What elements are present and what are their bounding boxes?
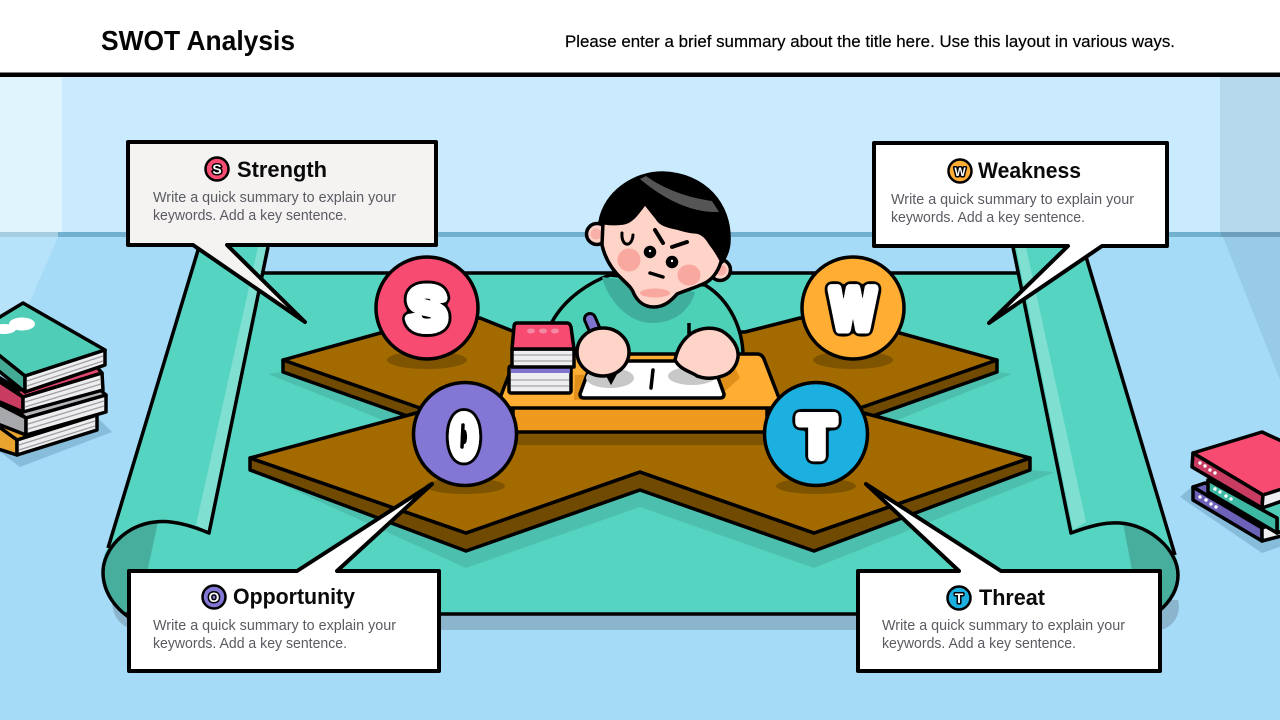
text: Threat description: Write a quick summary to explain your: [882, 618, 1125, 634]
text: Opportunity description: Write a quick summary to explain your: [153, 618, 396, 634]
W marker: W: [831, 277, 875, 342]
title: SWOT Analysis: [101, 25, 295, 56]
text: Weakness description: Write a quick summary to explain your: [891, 192, 1134, 208]
icon: O badge: [202, 586, 226, 608]
green mat: [102, 247, 1179, 630]
small desk: [500, 354, 779, 432]
stacked books on desk: [509, 323, 574, 393]
text: Strength description: keywords. Add a key sentence.: [153, 208, 347, 224]
right ear: [710, 260, 730, 280]
T marker: T: [799, 405, 835, 470]
callout: Threat: [858, 484, 1160, 671]
text: Opportunity description: keywords. Add a key sentence.: [153, 636, 347, 652]
icon: S badge: [206, 158, 228, 180]
eyes and brows: [622, 230, 687, 277]
face: [602, 177, 723, 307]
icon: W badge: [948, 160, 972, 182]
heading: Opportunity: Opportunity: [233, 584, 356, 609]
callout: Weakness: [874, 143, 1167, 323]
text: Threat description: keywords. Add a key sentence.: [882, 636, 1076, 652]
header bar: [0, 0, 1280, 77]
pen: [590, 319, 600, 342]
book stack right: [1180, 432, 1280, 553]
desk shadows on mat: [250, 372, 1055, 568]
left ear: [586, 224, 608, 244]
front desk plank: [250, 412, 1030, 551]
W marker: [802, 257, 904, 369]
character body: [552, 275, 743, 360]
text: Threat description: [882, 618, 1125, 652]
icon: O badge: O: [209, 589, 220, 605]
S marker: S: [408, 277, 446, 342]
heading: Strength: Strength: [237, 157, 327, 182]
text: Opportunity description: [153, 618, 396, 652]
book stack left: [0, 303, 112, 467]
text: Weakness description: [891, 192, 1134, 226]
text: Strength description: Write a quick summary to explain your: [153, 190, 396, 206]
hair: [600, 173, 729, 262]
icon: W badge: W: [954, 165, 966, 179]
character head: [586, 173, 730, 307]
T marker: [764, 382, 868, 494]
icon: T badge: [948, 586, 970, 610]
heading: Threat: Threat: [979, 585, 1046, 610]
hands: [577, 328, 738, 378]
callout: Strength: [128, 142, 436, 322]
O marker: O: [451, 405, 477, 468]
S marker: [376, 257, 478, 369]
heading: Weakness: Weakness: [978, 158, 1081, 183]
icon: T badge: T: [955, 590, 964, 606]
icon: S badge: S: [212, 161, 222, 177]
text: Weakness description: keywords. Add a key sentence.: [891, 210, 1085, 226]
back desk plank: [283, 318, 997, 417]
text: Strength description: [153, 190, 396, 224]
notebook: [580, 361, 724, 398]
callout: Opportunity: [129, 484, 439, 671]
O marker: [414, 382, 516, 494]
summary: Please enter a brief summary about the title here. Use this layout in various ways.: [565, 32, 1175, 51]
